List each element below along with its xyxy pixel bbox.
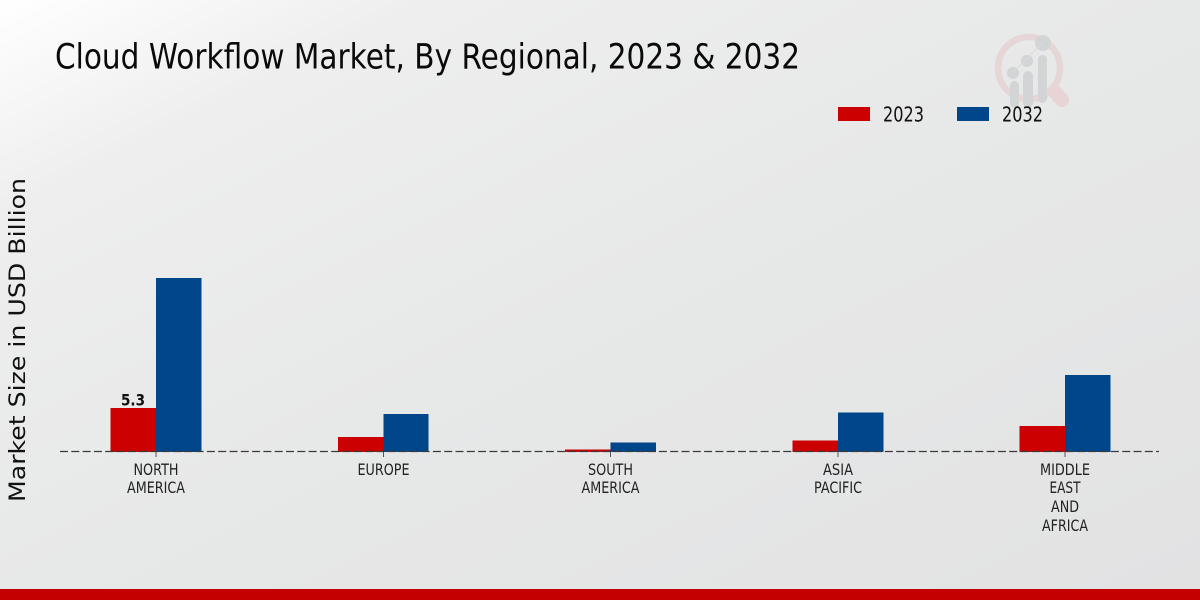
category labels [127,460,1090,535]
category labels: AMERICA [582,478,640,497]
legend [838,102,1043,126]
category labels: MIDDLE [1040,460,1090,479]
footer bar [0,589,1200,600]
category labels: AFRICA [1042,516,1088,535]
y axis title: Market Size in USD Billion [5,178,31,502]
category labels: EAST [1050,478,1081,497]
legend: 2032 [1002,102,1043,126]
legend: 2023 [883,102,924,126]
category labels: ASIA [823,460,853,479]
category labels: PACIFIC [814,478,862,497]
watermark logo [998,35,1062,108]
category labels: AMERICA [127,478,185,497]
category labels: NORTH [134,460,178,479]
bar chart [60,278,1159,457]
title: Cloud Workflow Market, By Regional, 2023 & 2032 [55,38,800,78]
category labels: EUROPE [358,460,410,479]
category labels: AND [1051,497,1079,516]
data label: 5.3 [121,390,145,410]
category labels: SOUTH [588,460,633,479]
